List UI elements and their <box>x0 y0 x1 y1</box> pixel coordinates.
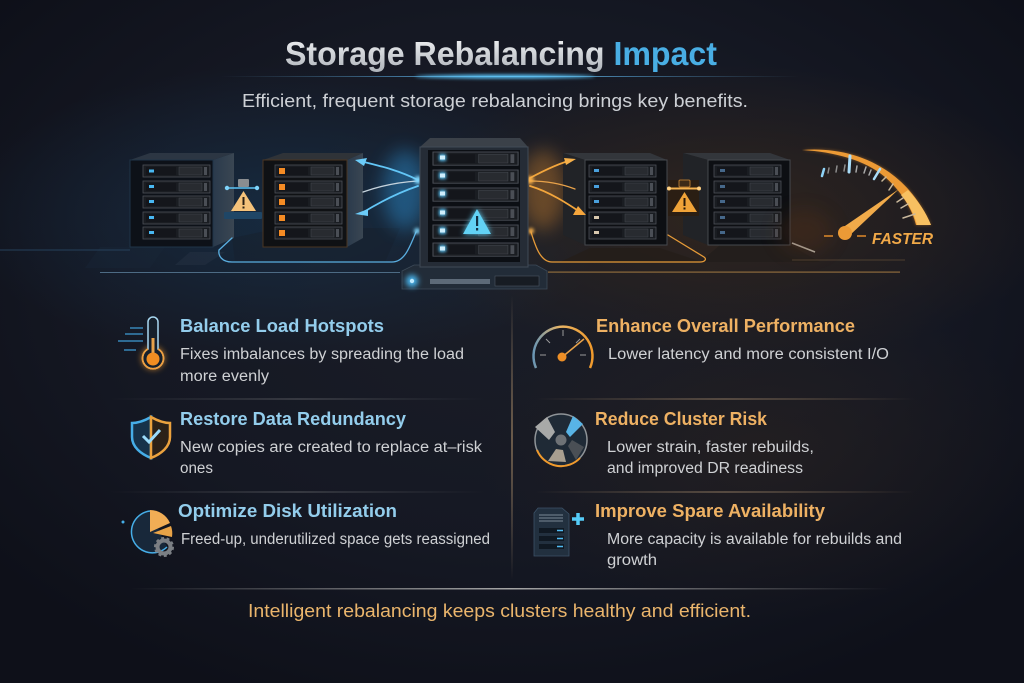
icon: server with plus <box>534 508 584 556</box>
arrows: orange to the right <box>526 158 705 262</box>
item: balance load hotspots: Fixes imbalances by spreading the load <box>180 346 464 363</box>
item: balance load hotspots: more evenly <box>180 368 269 385</box>
icon: gauge <box>534 327 592 368</box>
server 4 <box>683 153 790 245</box>
item: optimize disk utilization <box>122 501 490 556</box>
icon: thermometer <box>118 317 165 370</box>
icon: pie chart with gear <box>122 510 173 556</box>
warning: central <box>463 209 491 234</box>
server 2 orange <box>263 153 363 247</box>
server 3 <box>563 153 667 245</box>
item: balance load hotspots: Balance Load Hotspots <box>180 316 384 336</box>
warning: right <box>667 180 701 216</box>
item: reduce cluster risk: and improved DR readiness <box>607 460 803 477</box>
item: reduce cluster risk <box>535 409 814 477</box>
icon: shield <box>132 417 170 458</box>
item: enhance overall performance: Lower latency and more consistent I/O <box>608 346 889 363</box>
item: reduce cluster risk: Reduce Cluster Risk <box>595 409 768 429</box>
footer rule <box>130 588 890 590</box>
footer message: Intelligent rebalancing keeps clusters healthy and efficient. <box>248 601 751 621</box>
item: improve spare availability: More capacity is available for rebuilds and <box>607 531 902 548</box>
base unit <box>402 265 547 289</box>
row dividers <box>110 398 915 492</box>
title underline <box>220 74 800 78</box>
title: Storage Rebalancing Impact <box>285 35 717 72</box>
warning: left <box>224 179 262 219</box>
speedometer: faster <box>777 149 934 254</box>
item: optimize disk utilization: Optimize Disk Utilization <box>178 501 397 521</box>
illustration: servers rebalancing <box>0 138 934 289</box>
central glows <box>383 150 565 230</box>
item: restore data redundancy: Restore Data Redundancy <box>180 409 406 429</box>
item: restore data redundancy: ones <box>180 460 213 477</box>
item: optimize disk utilization: Freed-up, underutilized space gets reassigned <box>181 531 490 548</box>
item: improve spare availability: Improve Spare Availability <box>595 501 825 521</box>
speedometer: faster: FASTER <box>872 231 934 248</box>
item: enhance overall performance: Enhance Overall Performance <box>596 316 855 336</box>
arrows: blue to the left <box>219 158 422 262</box>
central server <box>420 138 528 267</box>
item: restore data redundancy <box>132 409 482 477</box>
floor circuit panels <box>0 228 905 273</box>
item: reduce cluster risk: Lower strain, faster rebuilds, <box>607 439 814 456</box>
item: balance load hotspots <box>118 316 464 385</box>
vertical divider <box>511 295 513 580</box>
item: improve spare availability <box>534 501 902 569</box>
item: enhance overall performance <box>534 316 889 368</box>
server 1 blue <box>130 153 234 247</box>
subtitle: Efficient, frequent storage rebalancing brings key benefits. <box>242 91 748 111</box>
item: restore data redundancy: New copies are created to replace at–risk <box>180 439 482 456</box>
item: improve spare availability: growth <box>607 552 657 569</box>
icon: fan <box>535 414 587 466</box>
